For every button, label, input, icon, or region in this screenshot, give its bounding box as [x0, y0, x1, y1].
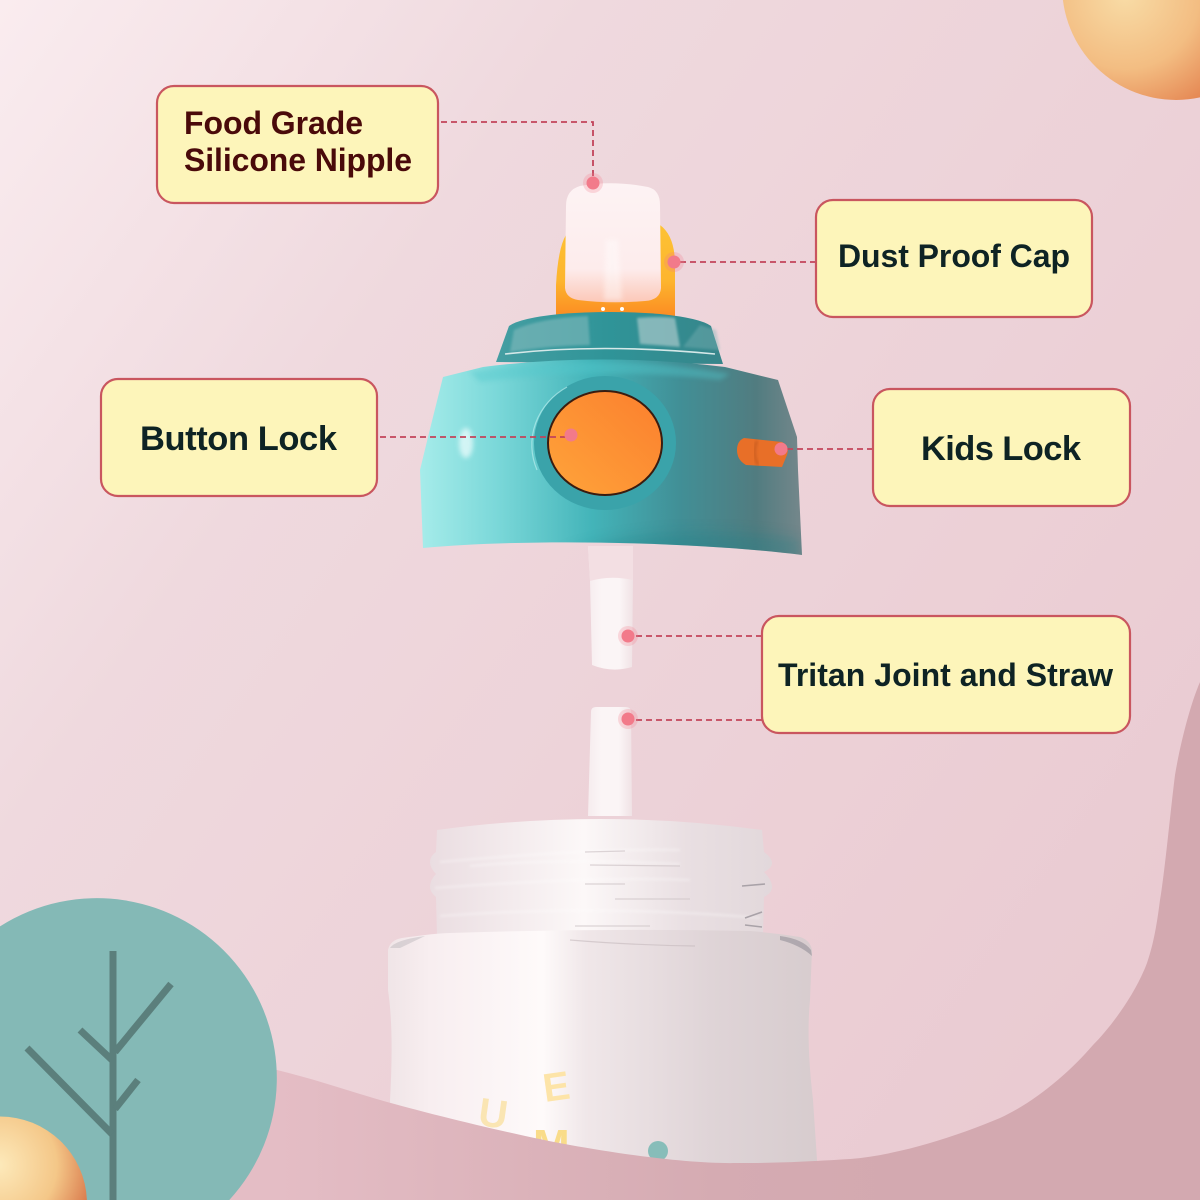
shoulder highlights: [390, 936, 812, 956]
bottle neck: [430, 819, 772, 936]
connector: kids lock: [774, 442, 873, 456]
bottle body: [388, 930, 818, 1175]
button lock: [532, 376, 676, 510]
callout: button lock: Button Lock: [140, 420, 338, 458]
teal lid body: [420, 360, 802, 560]
callout: tritan joint and straw: Tritan Joint and Straw: [778, 657, 1113, 693]
connector: straw: [618, 709, 762, 729]
connector: joint: [618, 626, 762, 646]
kids lock slider: [737, 438, 788, 467]
callout: food grade silicone nipple: [157, 86, 438, 203]
teal circle with tree: [0, 898, 277, 1200]
bottle print: U: [476, 1090, 510, 1138]
silicone nipple: [565, 183, 661, 311]
bottle print: E: [540, 1064, 573, 1111]
callout: food grade silicone nipple: Silicone Nipple: [184, 142, 412, 178]
callout: kids lock: [873, 389, 1130, 506]
callout: dust proof cap: Dust Proof Cap: [838, 238, 1070, 274]
connector: dust proof: [664, 252, 816, 272]
bottle print: [476, 1064, 668, 1170]
orange circle: top right: [1063, 0, 1200, 100]
icon: tree: [27, 951, 171, 1200]
callout: dust proof cap: [816, 200, 1092, 317]
callout: kids lock: Kids Lock: [921, 430, 1082, 468]
straw: upper tritan joint: [588, 546, 633, 670]
callout: button lock: [101, 379, 377, 496]
swoosh: [0, 682, 1200, 1200]
connector: button lock: [380, 428, 578, 442]
highlight on lid: [459, 428, 473, 458]
orange circle: bottom left: [0, 1116, 87, 1200]
callout: food grade silicone nipple: Food Grade: [184, 105, 363, 141]
connector: food grade: [441, 122, 603, 193]
dust proof cap: [556, 225, 675, 318]
bottle: [388, 819, 818, 1175]
callout: tritan joint and straw: [762, 616, 1130, 733]
straw: lower tube: [588, 707, 632, 816]
cap assembly: [420, 183, 802, 560]
bottle print: M: [533, 1121, 570, 1170]
upper teal ring: [496, 312, 723, 364]
